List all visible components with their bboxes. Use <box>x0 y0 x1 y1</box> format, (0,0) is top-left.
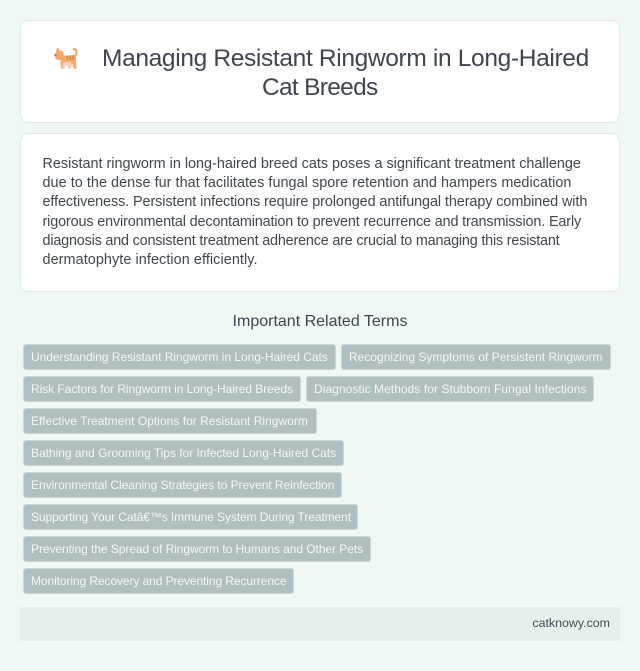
paragraph: dermatophyte infection efficiently. <box>42 252 258 268</box>
related terms tags <box>23 344 611 594</box>
related terms tags: Diagnostic Methods for Stubborn Fungal Infections <box>314 382 586 396</box>
icon: cat <box>54 48 78 69</box>
paragraph <box>42 156 587 268</box>
related terms tags: Effective Treatment Options for Resistant Ringworm <box>31 414 308 428</box>
paragraph: diagnosis and consistent treatment adherence are crucial to managing this resistant <box>42 233 560 249</box>
section heading: Important Related Terms <box>233 313 407 330</box>
footer <box>20 607 620 641</box>
related terms tags: Understanding Resistant Ringworm in Long-Haired Cats <box>31 350 328 364</box>
paragraph: due to the dense fur that facilitates fungal spore retention and hampers medication <box>42 175 571 191</box>
related terms tags: Bathing and Grooming Tips for Infected Long-Haired Cats <box>31 446 336 460</box>
related terms tags: Recognizing Symptoms of Persistent Ringworm <box>349 350 602 364</box>
heading: Managing Resistant Ringworm in Long-Haired <box>102 45 589 72</box>
paragraph: Resistant ringworm in long-haired breed cats poses a significant treatment challenge <box>42 156 581 172</box>
title card <box>20 20 620 123</box>
paragraph: rigorous environmental decontamination to prevent recurrence and transmission. Early <box>42 214 581 230</box>
related terms tags: Supporting Your Catâ€™s Immune System During Treatment <box>31 510 351 524</box>
related terms tags: Risk Factors for Ringworm in Long-Haired Breeds <box>31 382 293 396</box>
paragraph: effectiveness. Persistent infections require prolonged antifungal therapy combined with <box>42 194 587 210</box>
intro text panel <box>20 133 620 292</box>
related terms tags: Environmental Cleaning Strategies to Prevent Reinfection <box>31 478 334 492</box>
title card: Cat Breeds <box>262 74 378 101</box>
footer source text: catknowy.com <box>532 616 610 630</box>
related terms tags: Monitoring Recovery and Preventing Recurrence <box>31 574 286 588</box>
related terms tags: Preventing the Spread of Ringworm to Humans and Other Pets <box>31 542 363 556</box>
